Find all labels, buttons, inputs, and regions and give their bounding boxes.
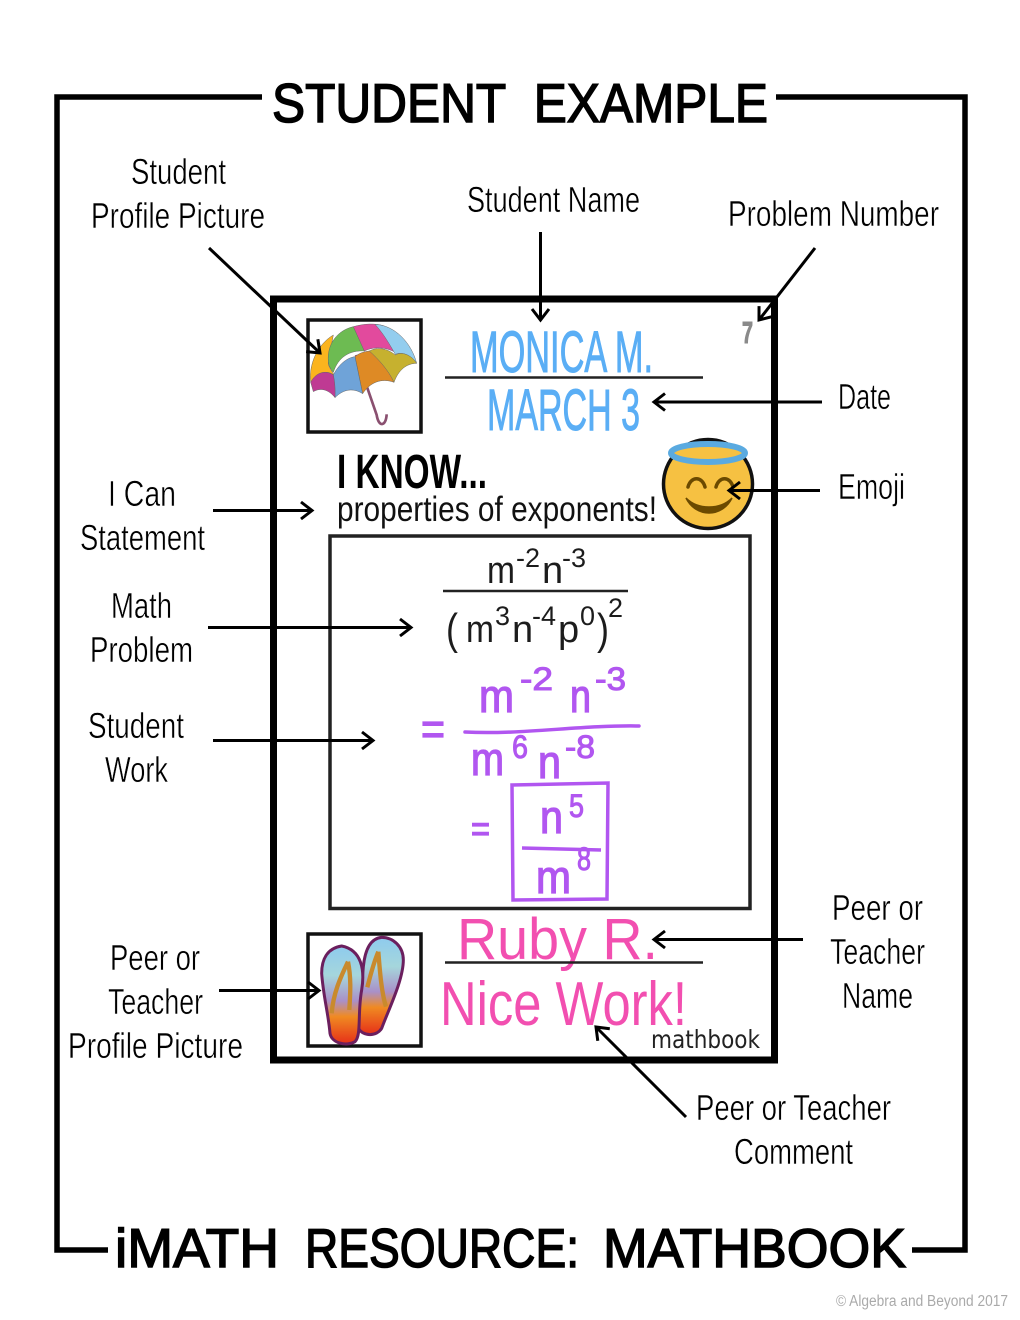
math problem: ( — [446, 605, 458, 654]
peer or teacher name: Ruby R. — [457, 907, 658, 972]
arrow: peer or teacher profile picture — [219, 989, 319, 992]
label: peer or teacher name: Teacher — [830, 931, 925, 972]
label: peer or teacher profile picture: Teacher — [108, 981, 203, 1022]
icon: umbrella profile picture — [308, 320, 421, 432]
i can statement: properties of exponents! — [337, 490, 657, 529]
footer title — [115, 1217, 906, 1279]
work box — [330, 536, 750, 908]
label: math problem: Math — [111, 585, 172, 626]
answer box: m — [536, 851, 571, 903]
label: student work: Work — [105, 749, 169, 790]
date: MARCH 3 — [487, 378, 640, 443]
math problem: p — [558, 609, 579, 651]
math problem: m — [487, 550, 515, 592]
label: student profile picture: Student — [131, 151, 226, 192]
label: peer or teacher profile picture: Peer or — [110, 937, 200, 978]
outer frame — [57, 97, 965, 1250]
label: peer or teacher name: Peer or — [832, 887, 923, 928]
label: student work: Student — [88, 705, 184, 746]
label: peer or teacher comment: Comment — [734, 1131, 853, 1172]
arrow: emoji — [729, 489, 820, 492]
arrow: peer or teacher name — [654, 938, 803, 941]
label: peer or teacher comment — [696, 1087, 891, 1172]
name divider — [445, 376, 703, 379]
footer title: iMATH — [115, 1217, 279, 1279]
arrow: peer or teacher comment — [596, 1027, 686, 1117]
label: math problem — [90, 585, 193, 670]
math problem: n — [542, 550, 563, 592]
student work: -3 — [595, 661, 626, 697]
student work: n — [570, 670, 591, 722]
label: peer or teacher comment: Peer or Teacher — [696, 1087, 891, 1128]
student work: -8 — [565, 729, 595, 765]
math problem: 0 — [580, 601, 595, 631]
arrow: student work — [213, 739, 373, 742]
problem number: 7 — [742, 315, 753, 350]
student work: m — [471, 733, 504, 785]
icon: flip flops profile picture — [308, 934, 421, 1046]
math problem: n — [512, 609, 533, 651]
label: student profile picture — [91, 151, 265, 236]
math problem: 3 — [495, 601, 510, 631]
label: i can statement: I Can — [108, 473, 176, 514]
peer or teacher comment: Nice Work! — [440, 970, 687, 1039]
label: peer or teacher profile picture: Profile Picture — [68, 1025, 243, 1066]
arrow: problem number — [759, 248, 815, 320]
math problem: -3 — [562, 543, 586, 573]
label: peer or teacher profile picture — [68, 937, 243, 1066]
label: i can statement: Statement — [80, 517, 205, 558]
answer box: 5 — [569, 788, 584, 824]
math problem: m — [466, 609, 494, 651]
i can statement — [337, 446, 657, 529]
student work: 6 — [512, 729, 528, 765]
arrow: math problem — [208, 626, 411, 629]
math problem — [443, 543, 628, 654]
student work: m — [479, 670, 514, 722]
answer box: n — [540, 791, 563, 843]
label: emoji: Emoji — [838, 466, 905, 507]
mathbook logo: mathbook — [651, 1025, 760, 1054]
answer box — [512, 783, 608, 903]
student name: MONICA M. — [470, 320, 653, 385]
title: STUDENT EXAMPLE — [272, 72, 768, 134]
student work: = — [471, 808, 490, 849]
i can statement: I KNOW... — [337, 446, 487, 499]
label: i can statement — [80, 473, 205, 558]
student work — [421, 661, 639, 903]
footer title: RESOURCE: — [305, 1217, 579, 1279]
label: peer or teacher name: Name — [842, 975, 913, 1016]
arrow: i can statement — [213, 509, 312, 512]
label: student work — [88, 705, 184, 790]
icon: halo smiley emoji — [664, 440, 752, 528]
footer title: MATHBOOK — [603, 1217, 906, 1279]
label: date: Date — [838, 376, 891, 417]
math problem: 2 — [608, 593, 623, 623]
label: math problem: Problem — [90, 629, 193, 670]
label: problem number: Problem Number — [728, 193, 939, 234]
card panel — [274, 299, 774, 1060]
arrow: date — [654, 400, 822, 404]
math problem: ) — [597, 605, 609, 654]
math problem: -2 — [516, 543, 540, 573]
student work: = — [421, 703, 445, 755]
answer box: 8 — [577, 841, 591, 877]
arrow: profile picture — [209, 248, 320, 353]
student work: n — [538, 736, 561, 788]
student work: -2 — [520, 661, 553, 697]
arrow: student name — [539, 232, 542, 320]
label: student profile picture: Profile Picture — [91, 195, 265, 236]
label: peer or teacher name — [830, 887, 925, 1016]
math problem: -4 — [532, 601, 556, 631]
comment divider — [445, 961, 703, 964]
label: student name: Student Name — [467, 179, 640, 220]
